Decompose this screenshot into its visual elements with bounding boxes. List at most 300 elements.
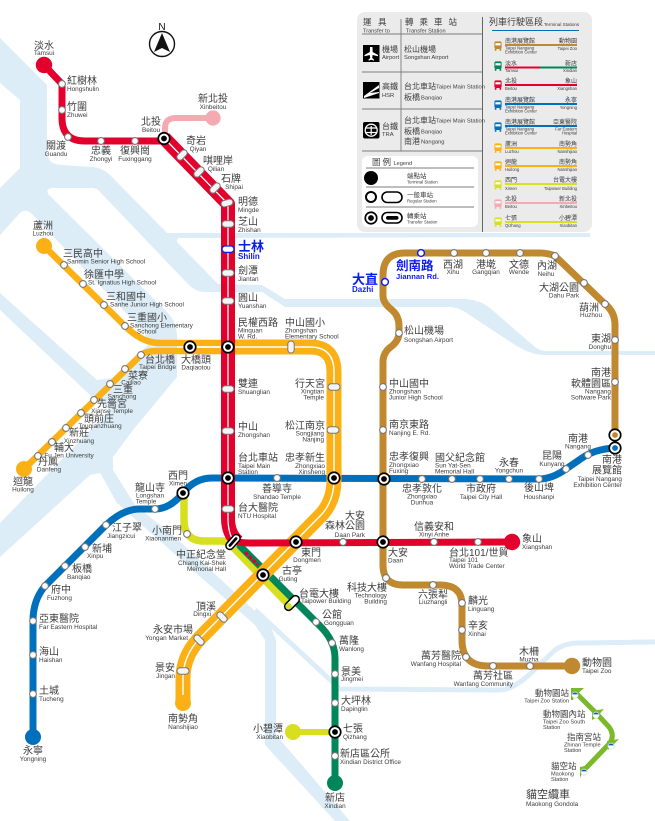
label: Longshan Temple: Longshan: [136, 492, 164, 500]
label: Nanjing E. Rd.: Nanjing E. Rd.: [389, 430, 430, 437]
label: Fu Jen University: 輔大: [54, 441, 74, 454]
label: Gongguan: 公館: [322, 608, 342, 621]
label: Fuxinggang: 復興崗: [120, 144, 150, 157]
label: Gangqian: Gangqian: [472, 269, 500, 276]
line: blue Nangang to Yongning: [25, 448, 615, 745]
airport row: Songshan Airport: [404, 55, 449, 61]
label: Chiang Kai-Shek Memorial Hall: 中正紀念堂: [176, 548, 226, 561]
label: Huzhou: 葫洲: [579, 302, 599, 314]
label: Nangang Software Park: Software Park: [571, 394, 612, 402]
label: Danfeng: 丹鳳: [38, 456, 58, 468]
HSR row: 台北車站: [404, 81, 436, 91]
airport row: 松山機場: [404, 44, 436, 54]
label: Taipei Nangang Exhibition Center: 展覽館: [592, 464, 622, 476]
route row: brown: Exhibition Center: [505, 50, 537, 54]
label: Jingmei: 景美: [341, 665, 361, 678]
label: Zhishan: 芝山: [238, 216, 258, 228]
legend title: 圖例: [372, 157, 393, 167]
label: Luzhou: Luzhou: [33, 230, 54, 238]
label: Xihu: Xihu: [447, 269, 460, 276]
label: Xiaonanmen: 小南門: [152, 524, 182, 537]
label: Sanhe Junior High School: 三和國中: [106, 290, 146, 303]
label: Zhongxiao Xinsheng: Xinsheng: [298, 469, 325, 476]
label: Donghu: 東湖: [591, 332, 611, 345]
line: orange Luzhou and Huilong to Nanshijiao: [16, 238, 340, 711]
label: Zhongshan: Zhongshan: [238, 432, 270, 439]
label: Guandu: Guandu: [45, 151, 68, 158]
label: Taipei 101 World Trade Center: Taipei 101: [449, 557, 479, 564]
label: Maokong Gondola: 貓空纜車: [526, 787, 570, 801]
label: Taipei Main Station: Taipei Main: [238, 463, 271, 470]
label: Daqiaotou: Daqiaotou: [181, 364, 211, 372]
label: Xinbeitou: 新北投: [198, 92, 228, 105]
label: Zhongxiao Dunhua: 忠孝敦化: [402, 482, 442, 495]
route row: orange Huilong: 迴龍: [505, 158, 517, 166]
label: Taipei Zoo Station: 動物園站: [535, 688, 569, 698]
label: Dongmen: 東門: [301, 546, 321, 559]
label: Fu Jen University: Fu Jen University: [44, 452, 94, 460]
route row: orange Huilong: 南勢角: [559, 158, 577, 166]
label: Shipai: 石牌: [221, 172, 241, 185]
label: Dongmen: Dongmen: [293, 557, 321, 564]
label: Zhongshan Elementary School: Zhongshan: [285, 328, 317, 334]
label: Sun Yat-Sen Memorial Hall: Sun Yat-Sen: [435, 462, 471, 470]
route row: blue to Far Eastern: 亞東醫院: [553, 118, 577, 126]
line: brown Nangang Exhibition Center to Taipei Zoo: [380, 250, 618, 674]
label: Qilian: 唭哩岸: [203, 154, 233, 167]
label: Sanmin Senior High School: Sanmin Senior High School: [67, 258, 145, 266]
label: Taipei Zoo: 動物園: [582, 656, 612, 669]
symbol legend box: [362, 156, 478, 227]
label: Longshan Temple: 龍山寺: [135, 481, 165, 494]
label: Kunyang: 昆陽: [542, 450, 562, 462]
label: Guandu: 關渡: [46, 139, 66, 152]
route row: yellow Ximen: Ximen: [505, 186, 518, 191]
line: pink Xinbeitou branch: [165, 110, 221, 135]
label: Tamsui: 淡水: [34, 40, 54, 52]
label: Xinyi Anhe: 信義安和: [414, 520, 454, 533]
label: Guting: 古亭: [282, 564, 302, 577]
label: Huzhou: Huzhou: [580, 312, 602, 319]
label: Taipei Nangang Exhibition Center: 南港: [602, 453, 622, 466]
label: Shilin: 士林: [238, 239, 264, 254]
label: Taipei Main Station: 台北車站: [238, 451, 278, 464]
label: Wanfang Community: 萬芳社區: [473, 669, 513, 682]
label: Danfeng: Danfeng: [37, 466, 62, 474]
label: Wende: Wende: [509, 269, 530, 276]
label: Zhongshan Elementary School: 中山國小: [285, 316, 325, 329]
route row: pink: 北投: [505, 195, 517, 203]
route row: brown: Taipei Nangang: [505, 46, 535, 50]
label: Taipei City Hall: Taipei City Hall: [460, 494, 502, 501]
icon: TRA railway: [363, 122, 380, 138]
label: Beitou: 北投: [141, 115, 161, 128]
label: Taipei Nangang Exhibition Center: Exhibition Center: [573, 482, 623, 489]
airport row: 機場: [382, 44, 398, 54]
legend header: transfer station: 轉乘車站: [405, 17, 463, 27]
route row: red: Xiangshan: [557, 86, 578, 91]
label: Jingan: Jingan: [156, 673, 175, 680]
label: Zhongxiao Dunhua: Zhongxiao: [407, 494, 437, 500]
label: Cailiao: 菜寮: [128, 369, 148, 382]
icon: high speed rail: [363, 82, 380, 98]
legend title: Legend: [394, 161, 412, 167]
route row: yellow Qizhang: Qizhang: [505, 223, 521, 228]
label: Cailiao: Cailiao: [121, 380, 141, 386]
label: Houshanpi: 後山埤: [524, 481, 554, 494]
label: Xiaonanmen: Xiaonanmen: [145, 536, 181, 542]
route row: pink: Beitou: [505, 204, 518, 209]
HSR row: 板橋: [404, 92, 420, 102]
label: St. Ignatius High School: 徐匯中學: [84, 268, 124, 281]
TRA row: 台鐵: [382, 121, 398, 131]
label: Dazhi: 大直: [352, 272, 378, 287]
label: Taipei Zoo Station: Taipei Zoo Station: [524, 698, 569, 704]
label: Maokong Station: Station: [551, 777, 568, 783]
label: Minquan W. Rd.: 民權西路: [238, 316, 278, 329]
icon: airplane: [363, 45, 380, 62]
route row: yellow Qizhang: 小碧潭: [559, 214, 577, 222]
label: Muzha: Muzha: [519, 656, 539, 664]
label: Xindian District Office: 新店區公所: [340, 747, 390, 760]
route row: red-green: [494, 60, 578, 73]
route row: blue to Yongning: 永寧: [565, 96, 577, 104]
HSR row: HSR: [382, 93, 394, 99]
label: Wanlong: Wanlong: [339, 646, 364, 653]
label: Minquan W. Rd.: Minquan: [238, 328, 263, 334]
label: Songjiang Nanjing: Songjiang: [296, 430, 324, 438]
route row: orange Luzhou: Luzhou: [505, 149, 519, 154]
label: Far Eastern Hospital: 亞東醫院: [39, 612, 79, 625]
label: Muzha: 木柵: [519, 645, 539, 658]
label: Haishan: Haishan: [39, 657, 63, 664]
label: Sun Yat-Sen Memorial Hall: Memorial Hall: [435, 468, 474, 476]
label: Liuzhangli: 六張犁: [418, 588, 448, 601]
route row: orange Luzhou: Nanshijiao: [557, 149, 578, 154]
label: Taipower Building: Taipower Building: [301, 598, 352, 605]
label: Xinpu: 新埔: [92, 542, 112, 555]
label: Yongan Market: Yongan Market: [145, 635, 188, 642]
label: Maokong Gondola: Maokong Gondola: [526, 801, 579, 808]
label: Yongning: 永寧: [23, 744, 43, 757]
label: Zhongshan Junior High School: Zhongshan: [389, 388, 421, 396]
label: Sanchong: Sanchong: [108, 394, 137, 400]
route row: red: 北投: [505, 77, 517, 85]
label: Qizhang: Qizhang: [343, 734, 367, 741]
label: Nangang: Nangang: [565, 444, 591, 450]
label: Sanchong Elementary School: School: [137, 328, 157, 336]
label: Daan Park: 大安: [345, 509, 365, 522]
label: Zhongxiao Fuxing: Zhongxiao: [389, 462, 419, 469]
label: Jiannan Rd.: 劍南路: [396, 258, 434, 273]
route row: orange Huilong: Nanshijiao: [557, 167, 578, 172]
north compass: N: [158, 22, 166, 33]
label: Daan Park: 森林公園: [325, 519, 365, 532]
label: Haishan: 海山: [39, 645, 59, 658]
label: Shandao Temple: 善導寺: [262, 482, 292, 495]
route row: red-green: Xindian: [563, 68, 578, 73]
label: Zhinan Temple Station: 指南宮站: [567, 732, 602, 742]
label: Sun Yat-Sen Memorial Hall: 國父紀念館: [435, 451, 485, 464]
regular station key: Regular Station: [407, 198, 437, 204]
label: Xinhai: 辛亥: [468, 619, 488, 632]
route row: red-green: Tamsui: [505, 68, 518, 73]
label: Jingan: 景安: [155, 661, 175, 674]
route row: blue to Yongning: Taipei Nangang: [505, 104, 535, 110]
TRA row: 台北車站: [404, 115, 436, 125]
label: Xiangshan: 象山: [522, 533, 542, 545]
route row: brown: 南港展覽館: [505, 37, 535, 45]
label: Shuanglian: Shuanglian: [238, 389, 270, 396]
route row: blue to Far Eastern: Exhibition Center: [505, 130, 537, 136]
label: Jingmei: Jingmei: [341, 676, 363, 683]
label: Qiyan: Qiyan: [190, 146, 207, 153]
route row: blue to Far Eastern: Hospital: [562, 130, 577, 136]
transfer station key: 轉乘站: [407, 211, 427, 220]
route row: orange Luzhou: 南勢角: [559, 140, 577, 148]
TRA row: 板橋: [404, 126, 420, 136]
label: Sanchong Elementary School: Sanchong Elementary: [130, 322, 194, 330]
label: Technology Building: Building: [364, 598, 387, 606]
label: Shilin: Shilin: [238, 252, 260, 261]
label: Donghu: Donghu: [589, 344, 611, 351]
label: Gangqian: 港墘: [476, 258, 496, 271]
label: Yongan Market: 永安市場: [153, 623, 193, 636]
legend title: terminal stations: 列車行駛區段: [489, 16, 543, 27]
label: Technology Building: 科技大樓: [347, 581, 387, 594]
label: Maokong Station: 貓空站: [551, 761, 577, 771]
label: Xindian: Xindian: [324, 803, 346, 810]
label: Nangang: 南港: [568, 432, 588, 445]
route row: pink: 新北投: [559, 195, 577, 203]
label: Xinzhuang: Xinzhuang: [64, 438, 95, 445]
label: Taipei Zoo South Station: Taipei Zoo South: [543, 720, 585, 726]
label: Longshan Temple: Temple: [136, 498, 157, 506]
label: Fuzhong: 府中: [51, 583, 71, 596]
label: Banqiao: 板橋: [72, 562, 92, 575]
route row: yellow Qizhang: 七張: [505, 214, 517, 222]
label: Nangang Software Park: 軟體園區: [571, 377, 611, 390]
label: Nangang Software Park: 南港: [591, 366, 611, 379]
label: Zhongxiao Xinsheng: Zhongxiao: [295, 463, 325, 470]
label: Yuanshan: 圓山: [238, 292, 258, 304]
label: Sanchong: 三重: [113, 383, 133, 396]
label: Taipei Zoo: Taipei Zoo: [582, 668, 612, 675]
HSR row: 高鐵: [382, 81, 398, 91]
HSR row: Banqiao: [421, 96, 442, 102]
route row: blue to Far Eastern: Taipei Nangang: [505, 126, 535, 132]
label: Nanshijiao: Nanshijiao: [168, 724, 198, 731]
label: Zhongshan Junior High School: Junior High School: [389, 394, 443, 402]
north compass: [150, 22, 174, 56]
label: Zhongshan Elementary School: Elementary School: [285, 334, 339, 340]
label: Xianse Temple: 先嗇宮: [97, 397, 127, 410]
label: Daan Park: Daan Park: [335, 532, 366, 539]
route row: yellow Qizhang: Xiaobitan: [560, 223, 578, 228]
label: Daan: Daan: [388, 558, 404, 564]
label: Tucheng: Tucheng: [39, 696, 64, 703]
route row: orange Huilong: Huilong: [505, 167, 520, 172]
legend header: transfer to: 運具: [363, 17, 393, 27]
TRA row: Nangang: [421, 140, 445, 146]
label: Zhongyi: 忠義: [91, 144, 111, 157]
label: Dahu Park: Dahu Park: [549, 292, 580, 300]
label: Taipei Zoo South Station: 動物園內站: [543, 709, 586, 719]
label: Tucheng: 土城: [39, 684, 59, 697]
label: Jiantan: 劍潭: [238, 264, 258, 277]
label: Yongning: Yongning: [20, 756, 47, 763]
label: Nanshijiao: 南勢角: [168, 712, 198, 725]
route row: yellow Ximen: [494, 176, 578, 191]
terminal station key: 端點站: [407, 171, 427, 180]
label: Xiaobitan: Xiaobitan: [256, 734, 283, 741]
label: Zhuwei: Zhuwei: [67, 112, 88, 119]
label: Xianse Temple: Xianse Temple: [91, 408, 133, 415]
route row: yellow Ximen: 西門: [505, 177, 517, 184]
label: Xindian: 新店: [325, 791, 345, 804]
route row: blue to Yongning: [494, 96, 578, 114]
label: Ximen: 西門: [168, 470, 188, 482]
legend title: terminal stations: Terminal Stations: [544, 22, 580, 27]
route row: red: Beitou: [505, 86, 518, 91]
label: Luzhou: 蘆洲: [33, 219, 53, 232]
label: Daan: 大安: [388, 546, 408, 559]
label: Zhongxiao Xinsheng: 忠孝新生: [285, 451, 325, 464]
label: Technology Building: Technology: [355, 592, 388, 600]
label: Shipai: Shipai: [225, 184, 243, 191]
label: Chiang Kai-Shek Memorial Hall: Memorial Hall: [187, 566, 226, 573]
route row: red-green: 淡水: [505, 60, 517, 68]
route row: yellow Ximen: Taipower Building: [544, 186, 578, 191]
label: Nangang Software Park: Nangang: [585, 388, 611, 396]
label: Mingde: 明德: [238, 195, 258, 208]
label: Dahu Park: 大湖公園: [539, 281, 579, 294]
label: Jiangzicui: 江子翠: [112, 522, 142, 534]
label: Wanfang Hospital: 萬芳醫院: [421, 649, 461, 662]
route row: yellow Qizhang: [494, 214, 578, 228]
label: Maokong Station: Maokong: [551, 772, 574, 778]
route row: pink: [494, 195, 578, 209]
transfer station key: Transfer Station: [407, 220, 438, 224]
label: Far Eastern Hospital: Far Eastern Hospital: [39, 624, 97, 631]
route row: blue to Yongning: Exhibition Center: [505, 108, 537, 114]
route row: blue to Far Eastern: Far Eastern: [555, 126, 578, 132]
label: Shuanglian: 雙連: [238, 377, 258, 390]
label: Zhinan Temple Station: Station: [564, 748, 581, 754]
label: Nanjing E. Rd.: 南京東路: [389, 418, 429, 431]
label: St. Ignatius High School: St. Ignatius High School: [88, 280, 156, 286]
label: Xinhai: Xinhai: [468, 631, 486, 638]
TRA row: 南港: [404, 136, 420, 146]
label: Dingxi: 頂溪: [196, 601, 216, 613]
label: Taipei Bridge: Taipei Bridge: [139, 364, 176, 371]
label: Yongchun: 永春: [499, 456, 519, 469]
label: Taipower Building: 台電大樓: [299, 587, 339, 600]
label: Minquan W. Rd.: W. Rd.: [238, 334, 257, 340]
label: Xindian District Office: Xindian District Office: [340, 759, 401, 766]
route row: pink: Xinbeitou: [560, 204, 578, 209]
label: Sanmin Senior High School: 三民高中: [63, 247, 103, 260]
label: Wende: 文德: [509, 258, 529, 271]
label: Taipei Bridge: 台北橋: [145, 353, 175, 366]
route row: brown: [494, 37, 578, 54]
label: Zhuwei: 竹圍: [67, 100, 87, 113]
label: Xiaobitan: 小碧潭: [253, 723, 283, 735]
label: Yuanshan: Yuanshan: [238, 303, 267, 310]
label: Dingxi: Dingxi: [193, 611, 211, 618]
label: Guting: Guting: [279, 576, 298, 583]
label: Banqiao: Banqiao: [67, 574, 91, 581]
label: Neihu: 內湖: [537, 260, 557, 272]
label: Yongchun: Yongchun: [495, 468, 524, 474]
label: Zhongxiao Fuxing: Fuxing: [389, 468, 409, 475]
label: Daqiaotou: 大橋頭: [181, 353, 211, 366]
label: Sanchong Elementary School: 三重國小: [127, 311, 167, 324]
label: Zhongxiao Fuxing: 忠孝復興: [389, 450, 429, 463]
regular station key: 一般車站: [407, 190, 434, 199]
label: Xinbeitou: Xinbeitou: [200, 104, 227, 111]
HSR row: Taipei Main Station: [436, 84, 485, 90]
route row: red-green: 新店: [565, 60, 577, 68]
label: Xinpu: Xinpu: [87, 553, 104, 560]
label: Huilong: Huilong: [12, 486, 34, 494]
route row: brown: 動物園: [559, 37, 577, 45]
label: Jiannan Rd.: Jiannan Rd.: [396, 272, 439, 281]
label: Zhongshan: 中山: [238, 420, 258, 433]
label: Taipei Main Station: Station: [238, 469, 258, 476]
label: Qiyan: 奇岩: [186, 134, 206, 147]
label: Zhongyi: Zhongyi: [90, 156, 112, 163]
label: Houshanpi: Houshanpi: [524, 494, 554, 501]
label: Xinzhuang: 新莊: [69, 426, 89, 439]
legend header: transfer station: Transfer Station: [406, 28, 446, 34]
label: Gongguan: Gongguan: [324, 620, 354, 627]
label: Jiantan: Jiantan: [238, 276, 259, 283]
line: red Tamsui to Xiangshan: [36, 57, 520, 550]
label: Liuzhangli: Liuzhangli: [419, 599, 447, 606]
label: Mingde: Mingde: [238, 207, 259, 214]
label: Sanhe Junior High School: Sanhe Junior High School: [110, 302, 184, 308]
label: Taipei City Hall: 市政府: [466, 482, 496, 495]
label: Zhinan Temple Station: Zhinan Temple: [564, 742, 601, 748]
legend header: transfer to: Transfer to: [363, 28, 390, 34]
label: Taipei Nangang Exhibition Center: Taipei Nangang: [578, 476, 622, 483]
label: Hongshulin: Hongshulin: [67, 86, 99, 93]
label: Songjiang Nanjing: Nanjing: [302, 436, 324, 444]
route row: blue to Yongning: 南港展覽館: [505, 96, 535, 104]
label: Taipei 101 World Trade Center: 台北101/世貿: [449, 546, 508, 559]
label: Chiang Kai-Shek Memorial Hall: Chiang Kai-Shek: [178, 560, 227, 567]
label: Fuzhong: Fuzhong: [47, 595, 72, 602]
interchange stations: [157, 132, 622, 739]
label: NTU Hospital: NTU Hospital: [238, 513, 276, 520]
label: NTU Hospital: 台大醫院: [238, 501, 278, 514]
label: Zhishan: Zhishan: [238, 227, 261, 234]
label: Wanfang Hospital: Wanfang Hospital: [411, 661, 461, 668]
label: Songshan Airport: Songshan Airport: [404, 337, 453, 344]
TRA row: TRA: [382, 132, 394, 138]
route row: blue to Far Eastern: 南港展覽館: [505, 118, 535, 126]
route row: blue to Far Eastern: [494, 118, 578, 136]
label: Beitou: Beitou: [142, 127, 161, 134]
label: Xingtian Temple: 行天宮: [295, 377, 325, 390]
TRA row: Taipei Main Station: [436, 118, 485, 124]
label: Zhongxiao Dunhua: Dunhua: [411, 500, 434, 506]
label: Touqianzhuang: 頭前庄: [84, 412, 114, 425]
label: Linguang: Linguang: [468, 606, 495, 613]
line: green to Xindian: [240, 546, 343, 791]
terminal station key: Terminal Station: [407, 180, 438, 184]
